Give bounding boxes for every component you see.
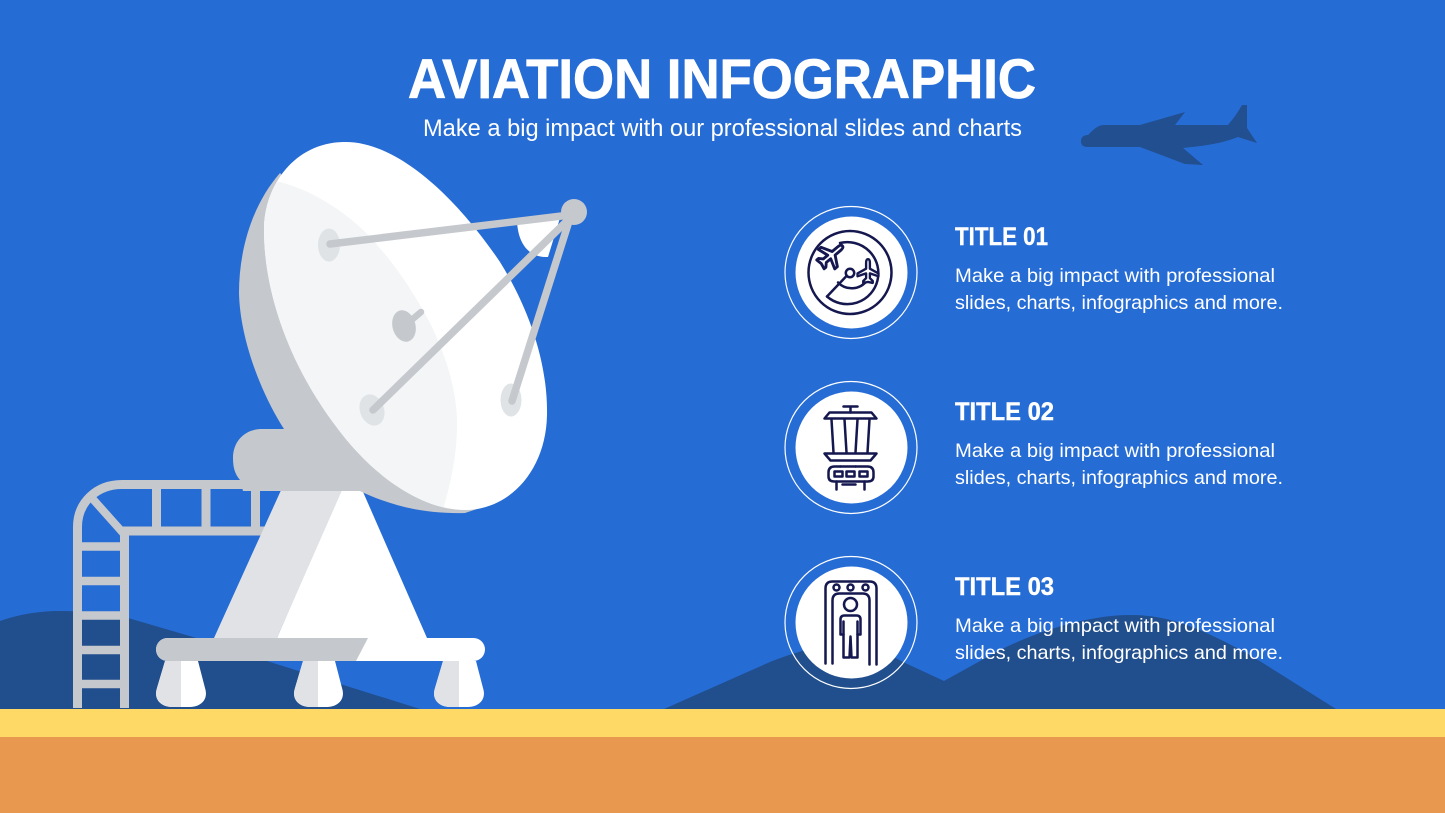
text 01: slides, charts, infographics and more. (955, 292, 1283, 314)
text 03 (955, 615, 1283, 664)
item 02 (785, 382, 1283, 514)
text 01: Make a big impact with professional (955, 265, 1275, 287)
feed support rods (330, 215, 570, 410)
heading 02: TITLE 02 (955, 398, 1054, 426)
center hub (389, 308, 421, 344)
access ladder and walkway (78, 484, 285, 708)
icon: control tower (785, 382, 917, 514)
text 03: slides, charts, infographics and more. (955, 642, 1283, 664)
heading 01: TITLE 01 (955, 223, 1048, 251)
mountains left (0, 611, 420, 709)
text 02: Make a big impact with professional (955, 440, 1275, 462)
icon: security scanner (785, 556, 917, 688)
text 02: slides, charts, infographics and more. (955, 467, 1283, 489)
radar dish illustration (78, 142, 587, 708)
mountains right (664, 615, 1336, 709)
tower pedestal (214, 485, 427, 661)
platform with feet (156, 638, 485, 707)
ground: sand stripe (0, 709, 1445, 738)
heading 03: TITLE 03 (955, 573, 1054, 601)
subtitle: Make a big impact with our professional slides and charts (423, 115, 1022, 142)
title: AVIATION INFOGRAPHIC (408, 47, 1036, 110)
ground: orange band (0, 737, 1445, 813)
text 03: Make a big impact with professional (955, 615, 1275, 637)
dish shaded inner face (264, 182, 457, 508)
text 01 (955, 265, 1283, 314)
icon: airplane silhouette (1081, 105, 1257, 165)
dish back shell (233, 173, 480, 513)
feed support backing (517, 218, 560, 257)
feed horn ball (561, 199, 587, 225)
item 01 (785, 206, 1283, 338)
dish face (264, 142, 547, 510)
mount pads (318, 228, 522, 429)
icon: radar with planes (785, 206, 917, 338)
text 02 (955, 440, 1283, 489)
item 03 (785, 556, 1283, 688)
